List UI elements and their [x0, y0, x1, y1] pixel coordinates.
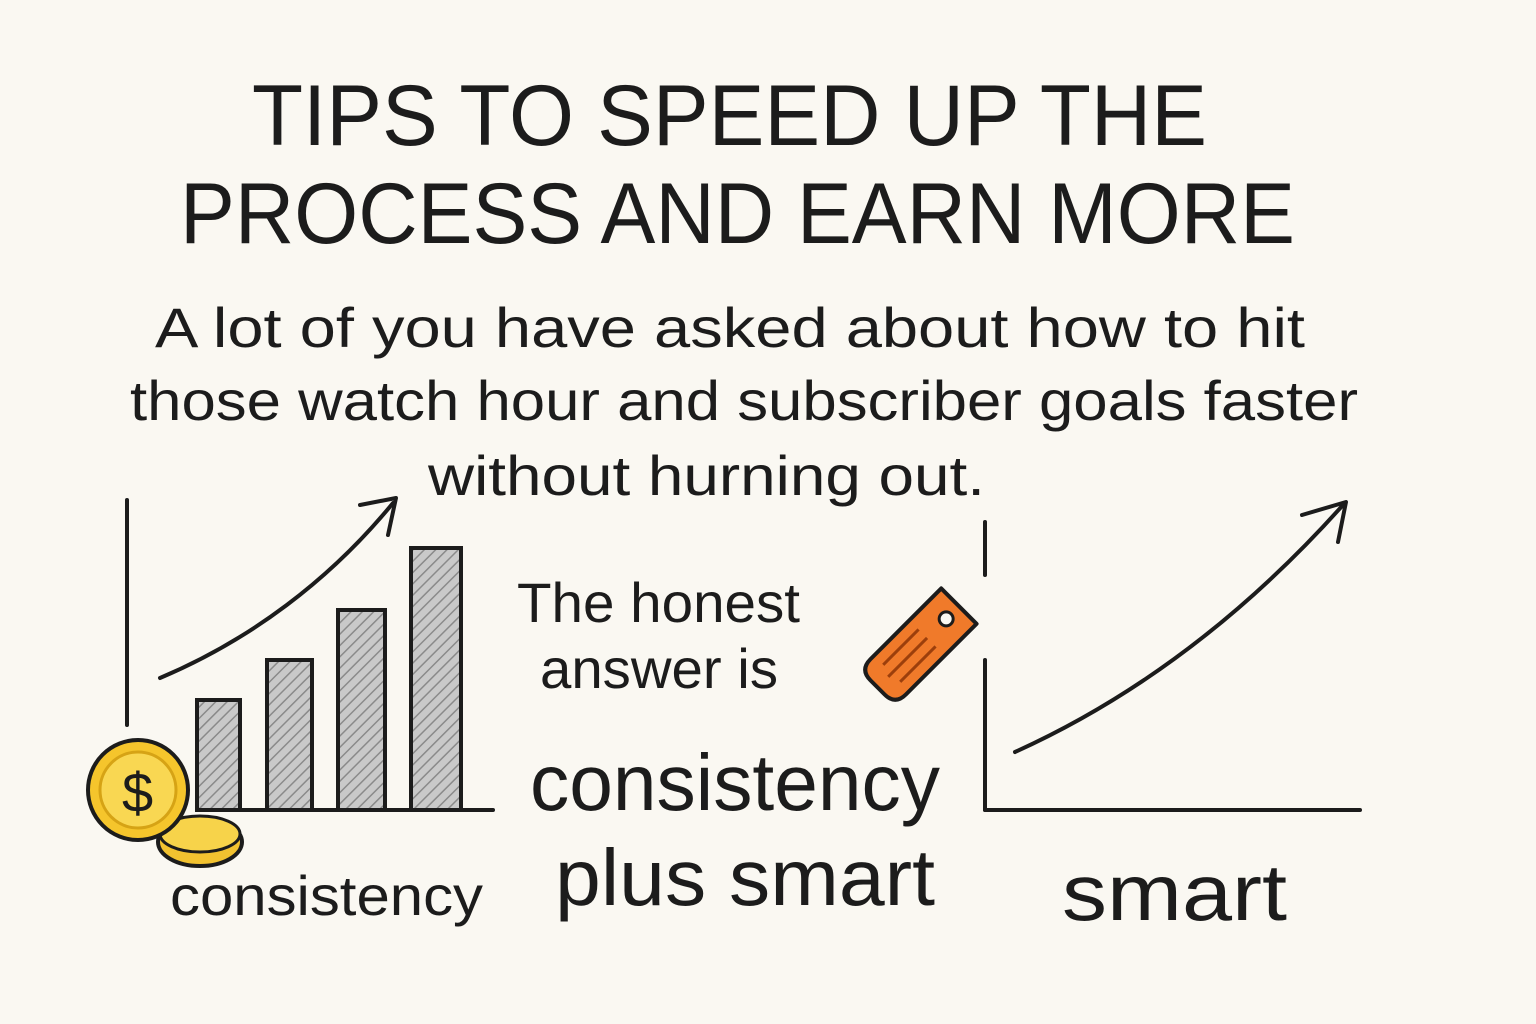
- icon: coins: [88, 740, 242, 866]
- intro text: without hurning out.: [427, 444, 985, 507]
- label: smart: smart: [1062, 848, 1287, 937]
- arrow: growth right: [1015, 502, 1346, 752]
- icon: coins: $: [122, 761, 153, 824]
- text: the honest answer is: [517, 571, 800, 700]
- arrow: growth left: [160, 498, 396, 678]
- text: consistency plus smart: consistency: [530, 738, 940, 827]
- title: [180, 68, 1295, 262]
- intro text: those watch hour and subscriber goals faster: [130, 369, 1358, 432]
- text: the honest answer is: answer is: [540, 637, 778, 700]
- intro text: [130, 296, 1358, 507]
- label: consistency left: consistency: [170, 864, 483, 927]
- text: the honest answer is: The honest: [517, 571, 800, 634]
- intro text: A lot of you have asked about how to hit: [155, 296, 1306, 359]
- text: consistency plus smart: plus smart: [555, 833, 935, 922]
- text: consistency plus smart: [530, 738, 940, 922]
- icon: price tag: [860, 588, 977, 705]
- title: PROCESS AND EARN MORE: [180, 166, 1295, 262]
- line chart: smart: [985, 502, 1360, 810]
- bar chart: consistency: [127, 498, 493, 810]
- title: TIPS TO SPEED UP THE: [252, 68, 1207, 164]
